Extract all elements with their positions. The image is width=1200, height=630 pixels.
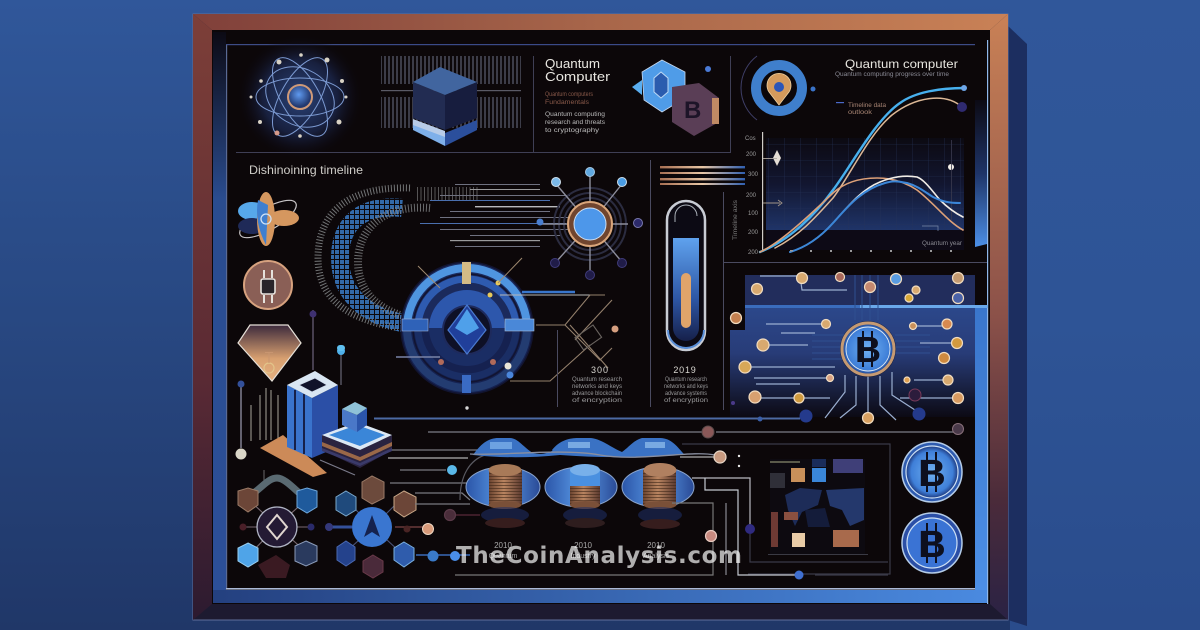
- year labels under coins: 2010: [574, 541, 592, 550]
- world map panel: [768, 459, 868, 555]
- divider lines mid: [557, 160, 987, 410]
- icon: bitcoin coin upper: B: [918, 453, 946, 495]
- heading: timeline: Dishinoining timeline: [249, 163, 363, 177]
- panel: data wave U shape: [318, 188, 480, 330]
- bitcoin coin: [840, 321, 896, 377]
- circuit nodes: [730, 272, 964, 424]
- icon: bitcoin coin lower: B: [918, 524, 946, 566]
- panel: quantum chip cube: [381, 56, 521, 146]
- chart: quantum computer line chart: 200: [746, 152, 757, 158]
- chart: quantum computer line chart: 300: [748, 172, 759, 178]
- circuit linkage icon: [510, 295, 618, 381]
- dashboard dial: [396, 258, 595, 410]
- text block: timeline year 2019: 2019: [673, 365, 697, 375]
- text block: quantum computer heading: Quantum computers: [545, 92, 593, 98]
- text block: quantum computer heading: to cryptography: [545, 128, 599, 134]
- data streak lines: [420, 184, 570, 247]
- chart: quantum computer line chart: 200: [748, 250, 759, 256]
- picture frame: [193, 14, 1008, 620]
- panel: bitcoin circuit board: [730, 272, 988, 424]
- year labels under coins: [489, 541, 670, 560]
- panel: atom illustration: [238, 35, 362, 159]
- text block: timeline year 2019: advance systems: [665, 391, 707, 397]
- connector lines right: [455, 444, 890, 580]
- chart: quantum computer line chart: 200: [746, 193, 757, 199]
- text block: timeline year 300: advance blockchain: [572, 391, 622, 397]
- icon: hex network right: [325, 476, 470, 578]
- text block: quantum computer heading: Quantum: [545, 56, 600, 71]
- icon: crypto hexagons: [632, 60, 719, 136]
- text block: timeline year 300: Quantum research: [572, 377, 622, 383]
- chart: quantum computer line chart: Quantum computer: [845, 57, 958, 71]
- chart: quantum computer line chart: 200: [748, 230, 759, 236]
- chart: quantum computer line chart: Quantum year: [922, 241, 962, 247]
- text block: timeline year 2019: networks and keys: [664, 384, 708, 390]
- icon: bitcoin coin lower: [902, 513, 962, 573]
- chart: quantum computer line chart: Timeline data: [848, 103, 887, 109]
- year labels under coins: Quantum: [489, 553, 518, 560]
- text block: quantum computer heading: Computer: [545, 69, 611, 84]
- icon: orbit emblem: [235, 192, 301, 246]
- coin stacks trio: [466, 438, 715, 529]
- connector lines left of coins: [388, 450, 485, 520]
- chart: quantum computer line chart: Cos: [745, 136, 756, 142]
- text block: timeline year 300: 300: [591, 365, 609, 375]
- server isometric block: [236, 310, 345, 477]
- chart: quantum computer line chart: outlook: [848, 110, 873, 116]
- icon: glowing orbit node: [536, 168, 642, 280]
- year labels under coins: Industry: [571, 553, 596, 560]
- text block: quantum computer heading: [545, 56, 611, 134]
- text block: quantum computer heading: research and threats: [545, 120, 605, 126]
- frame drop shadow: [1008, 26, 1027, 626]
- year labels under coins: 2010: [647, 541, 665, 550]
- bitcoin coin: B: [855, 329, 881, 370]
- divider box top: [236, 44, 762, 153]
- text block: timeline year 300: [572, 365, 622, 404]
- layered stack and small box: [320, 402, 392, 475]
- year labels under coins: 2010: [494, 541, 512, 550]
- thermometer capsule: [667, 201, 705, 350]
- chart: quantum computer line chart: Timeline axis: [733, 200, 739, 240]
- icon: location ring: [741, 56, 816, 120]
- text block: quantum computer heading: Fundamentals: [545, 100, 589, 106]
- text block: timeline year 2019: [664, 365, 708, 404]
- icon: bitcoin coin upper: [902, 442, 962, 502]
- gradient bars: [660, 166, 745, 185]
- text block: timeline year 300: networks and keys: [572, 384, 622, 390]
- timeline rule with nodes: [374, 416, 964, 438]
- text block: timeline year 300: of encryption: [572, 398, 622, 404]
- icon: crypto hexagons: B: [684, 97, 701, 124]
- icon: hex network left: [238, 470, 317, 578]
- chart: quantum computer line chart: 100: [748, 211, 759, 217]
- icon: bronze plug badge: [244, 261, 292, 309]
- chart: quantum computer line chart: [733, 57, 967, 256]
- year labels under coins: Analysis: [643, 553, 670, 560]
- text block: quantum computer heading: Quantum computing: [545, 112, 605, 118]
- watermark: TheCoinAnalysis.com: [456, 543, 742, 569]
- text block: timeline year 2019: Quantum research: [665, 377, 707, 383]
- inner blue strips: [213, 32, 988, 604]
- chart: quantum computer line chart: Quantum computing progress over time: [835, 72, 950, 78]
- icon: gem pentagon: [238, 325, 301, 381]
- text block: timeline year 2019: of encryption: [664, 398, 708, 404]
